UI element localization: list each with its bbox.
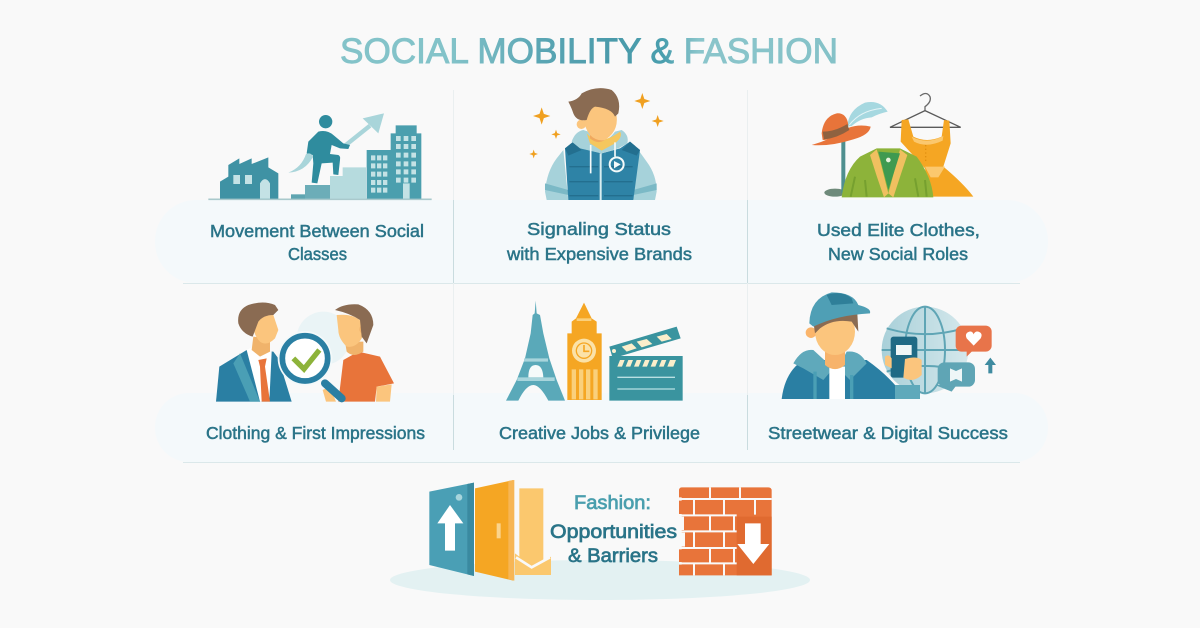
platform ellipse — [390, 560, 810, 600]
panel: movement between social classes — [208, 113, 432, 264]
icon: sparkles — [529, 93, 664, 158]
icon: person in branded vest with sparkles — [545, 88, 657, 200]
label: Used Elite Clothes, — [817, 220, 980, 240]
label: Signaling Status — [527, 219, 671, 239]
panel: signaling status — [506, 88, 692, 264]
label: Clothing & First Impressions — [206, 423, 425, 443]
label: New Social Roles — [828, 244, 968, 264]
label: Creative Jobs & Privilege — [499, 423, 700, 443]
panel: clothing and first impressions — [206, 302, 425, 443]
icon: brick wall with down arrow — [679, 487, 772, 575]
label: Streetwear & Digital Success — [768, 423, 1008, 443]
label: Movement Between Social — [210, 221, 424, 241]
heading: Opportunities — [550, 521, 677, 543]
label: with Expensive Brands — [506, 244, 692, 264]
panel: creative jobs and privilege — [499, 301, 700, 443]
heading: & Barriers — [568, 545, 658, 567]
label — [210, 221, 424, 264]
label — [506, 219, 692, 264]
heading — [550, 492, 677, 567]
icon: Eiffel Tower, Big Ben and film clapper — [506, 301, 683, 401]
icon: open doors with up and down arrows — [429, 480, 551, 581]
label: Classes — [288, 244, 347, 264]
panel: fashion opportunities and barriers — [390, 480, 810, 600]
icon: young man with cap, phone, globe and social bubbles — [782, 292, 996, 399]
icon: two men and magnifying glass with check — [216, 302, 394, 402]
heading: Fashion: — [574, 492, 651, 514]
label — [817, 220, 980, 264]
icon: person climbing stairs between factory and city — [208, 113, 432, 199]
icon: hat, jacket and dress on hanger — [812, 93, 973, 197]
panel: streetwear and digital success — [768, 292, 1008, 443]
title: SOCIAL MOBILITY & FASHION — [340, 32, 838, 71]
panel: used elite clothes — [812, 93, 980, 264]
